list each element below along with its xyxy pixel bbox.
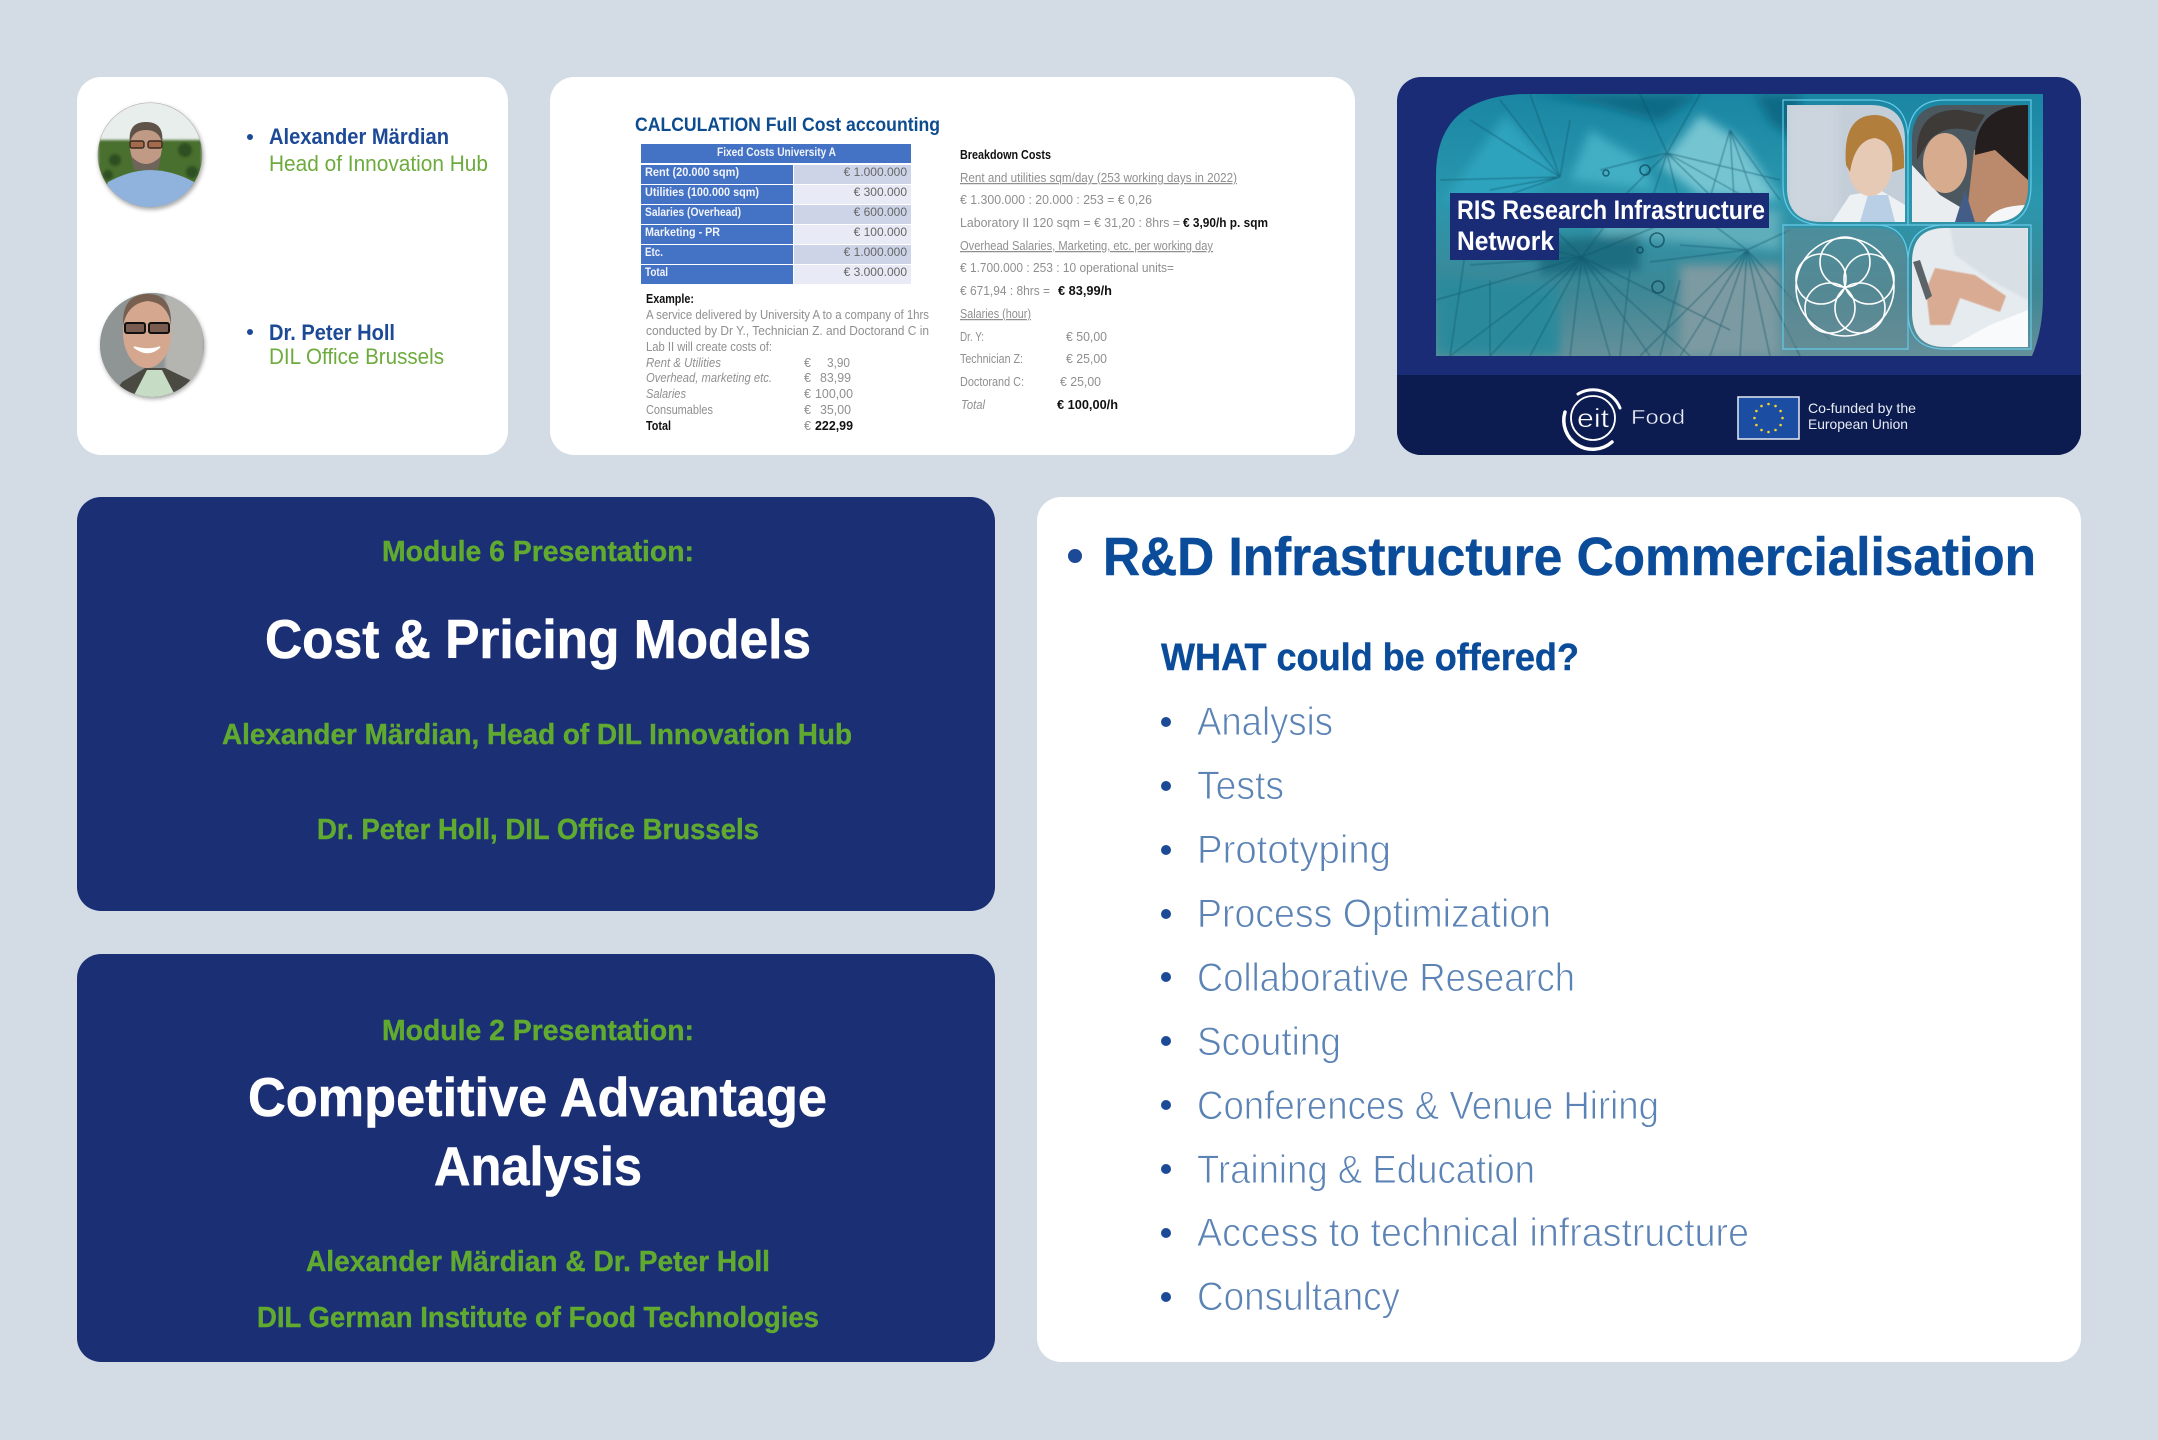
photo: female researcher [1787, 105, 1905, 222]
logo: EU flag with co-funding text: European Union [1808, 416, 1908, 432]
example calculation: € [804, 387, 811, 401]
breakdown costs: Technician Z: [960, 352, 1023, 366]
offerings list: Collaborative Research [1197, 956, 1575, 1000]
example calculation: € [804, 371, 811, 385]
table: fixed costs University A: Fixed Costs University A [717, 145, 836, 159]
example calculation: € [804, 356, 811, 370]
breakdown costs: Breakdown Costs [960, 148, 1051, 162]
photo: Dr. Peter Holl [100, 293, 204, 397]
example calculation: Salaries [646, 387, 686, 401]
module 2 title: Competitive Advantage [248, 1066, 827, 1128]
example calculation: 222,99 [815, 419, 853, 433]
footer band [1397, 375, 2081, 455]
table: fixed costs University A: € 1.000.000 [844, 165, 907, 179]
title label [1450, 193, 1769, 260]
breakdown costs: Total [961, 398, 986, 412]
offerings list: Process Optimization [1197, 892, 1551, 936]
table: fixed costs University A: Salaries (Overhead) [645, 205, 741, 219]
panel: speakers [77, 77, 508, 455]
breakdown costs: € 1.300.000 : 20.000 : 253 = € 0,26 [960, 193, 1152, 207]
offerings list: Analysis [1197, 700, 1333, 744]
breakdown costs: € 671,94 : 8hrs = [960, 284, 1050, 298]
breakdown costs: € 25,00 [1060, 375, 1101, 389]
table: fixed costs University A: € 600.000 [854, 205, 907, 219]
dandelion background picture [1436, 94, 2043, 356]
photo: male researchers [1912, 105, 2028, 222]
example calculation [646, 292, 929, 433]
table: fixed costs University A [641, 144, 911, 284]
logo: EU flag with co-funding text: Co-funded by the [1808, 400, 1916, 416]
table: fixed costs University A: Marketing - PR [645, 225, 720, 239]
photo: Alexander Märdian [98, 103, 205, 208]
table: fixed costs University A: Etc. [645, 245, 663, 259]
module 6 presenter 1: Alexander Märdian, Head of DIL Innovation Hub [222, 719, 852, 751]
breakdown costs: Overhead Salaries, Marketing, etc. per working day [960, 239, 1214, 253]
module 6 label: Module 6 Presentation: [382, 536, 694, 568]
breakdown costs [960, 148, 1268, 412]
panel: RIS Research Infrastructure Network [1397, 77, 2081, 455]
panel: Module 2 presentation [77, 954, 995, 1362]
table: fixed costs University A: € 300.000 [854, 185, 907, 199]
logo: EIT Food: Food [1631, 407, 1685, 429]
example calculation: Consumables [646, 403, 713, 417]
example calculation: Rent & Utilities [646, 356, 721, 370]
panel: full cost calculation [550, 77, 1355, 455]
module 6 presenter 2: Dr. Peter Holl, DIL Office Brussels [317, 814, 759, 846]
table: fixed costs University A: € 100.000 [854, 225, 907, 239]
breakdown costs: Salaries (hour) [960, 307, 1031, 321]
breakdown costs: € 83,99/h [1058, 284, 1112, 298]
example calculation: Overhead, marketing etc. [646, 371, 772, 385]
example calculation: Total [646, 419, 671, 433]
logo: EIT Food: eit [1577, 403, 1610, 433]
module 2 institute: DIL German Institute of Food Technologies [257, 1302, 819, 1334]
example calculation: Lab II will create costs of: [646, 340, 772, 354]
example calculation: 100,00 [815, 387, 853, 401]
breakdown costs: € 3,90/h p. sqm [1183, 216, 1268, 230]
module 2 label: Module 2 Presentation: [382, 1015, 694, 1047]
speaker 1 text [247, 124, 488, 176]
photo frames [1783, 100, 2031, 349]
offerings list: Conferences & Venue Hiring [1197, 1084, 1659, 1128]
table: fixed costs University A: Utilities (100.000 sqm) [645, 185, 759, 199]
breakdown costs: € 1.700.000 : 253 : 10 operational units= [960, 261, 1174, 275]
speaker 1 text: Head of Innovation Hub [269, 151, 488, 176]
offerings list: Consultancy [1197, 1275, 1400, 1319]
offerings list: Scouting [1197, 1020, 1341, 1064]
breakdown costs: € 50,00 [1066, 330, 1107, 344]
breakdown costs: Doctorand C: [960, 375, 1024, 389]
table: fixed costs University A: Total [645, 265, 668, 279]
table: fixed costs University A: € 3.000.000 [844, 265, 907, 279]
speaker 2 text: Dr. Peter Holl [269, 320, 395, 345]
example calculation: € [804, 419, 811, 433]
speaker 2 text: DIL Office Brussels [269, 344, 444, 369]
photo: hands with tablet [1912, 228, 2028, 347]
offerings list [1161, 700, 1749, 1319]
speaker 1 text: Alexander Märdian [269, 124, 449, 149]
offerings list: Prototyping [1197, 828, 1391, 872]
module 6 title: Cost & Pricing Models [265, 608, 811, 670]
offerings list: Tests [1197, 764, 1284, 808]
example calculation: 3,90 [827, 356, 850, 370]
module 2 title: Analysis [434, 1135, 642, 1197]
offerings list: Access to technical infrastructure [1197, 1211, 1749, 1255]
breakdown costs: Rent and utilities sqm/day (253 working days in 2022) [960, 171, 1237, 185]
calculation title: CALCULATION Full Cost accounting [635, 114, 940, 136]
module 2 title [248, 1066, 827, 1197]
logo: EIT Food [1564, 390, 1685, 449]
title label: Network [1457, 226, 1554, 256]
breakdown costs: € 100,00/h [1057, 398, 1118, 412]
breakdown costs: Dr. Y: [960, 330, 984, 344]
example calculation: 83,99 [820, 371, 851, 385]
offerings list: Training & Education [1197, 1148, 1535, 1192]
logo: EU flag with co-funding text [1738, 397, 1916, 439]
example calculation: 35,00 [820, 403, 851, 417]
panel: Module 6 presentation [77, 497, 995, 911]
panel: R&D infrastructure commercialisation [1037, 497, 2081, 1362]
example calculation: A service delivered by University A to a company of 1hrs [646, 308, 929, 322]
subheading: WHAT could be offered? [1161, 637, 1579, 679]
icon: flower of life [1785, 228, 1907, 347]
table: fixed costs University A: € 1.000.000 [844, 245, 907, 259]
example calculation: € [804, 403, 811, 417]
heading: R&D Infrastructure Commercialisation [1103, 527, 2036, 587]
example calculation: conducted by Dr Y., Technician Z. and Doctorand C in [646, 324, 929, 338]
table: fixed costs University A: Rent (20.000 sqm) [645, 165, 739, 179]
speaker 2 text [247, 320, 444, 369]
breakdown costs: € 25,00 [1066, 352, 1107, 366]
breakdown costs: Laboratory II 120 sqm = € 31,20 : 8hrs = [960, 216, 1180, 230]
module 2 presenters: Alexander Märdian & Dr. Peter Holl [306, 1246, 770, 1278]
example calculation: Example: [646, 292, 694, 306]
title label: RIS Research Infrastructure [1457, 195, 1765, 225]
